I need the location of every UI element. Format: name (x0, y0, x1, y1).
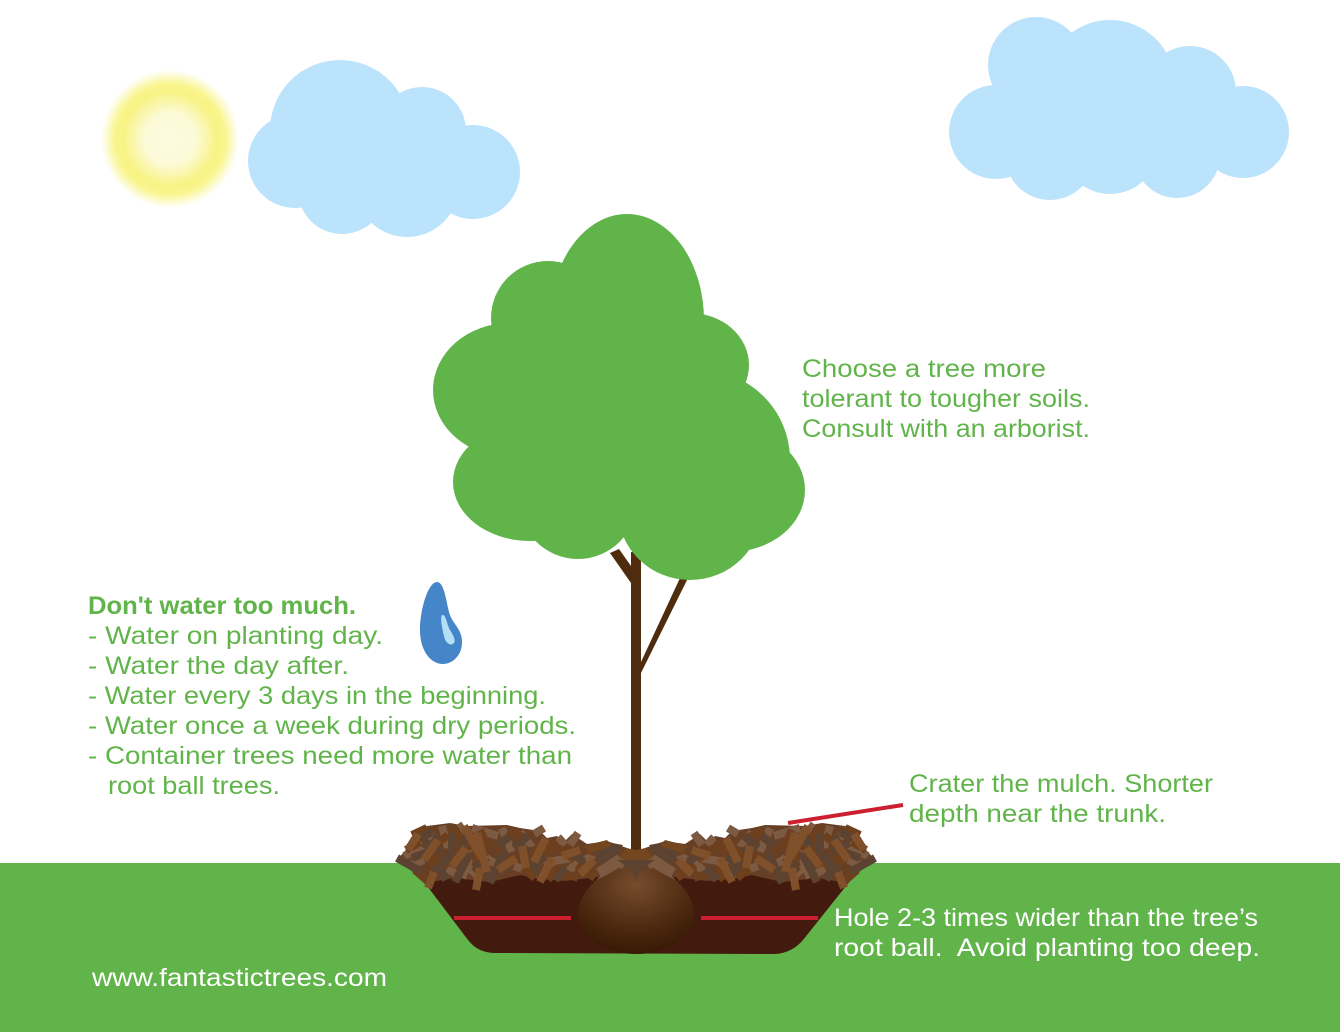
text: choose a tree: Consult with an arborist. (802, 415, 1090, 443)
text: watering advice: - Water the day after. (88, 652, 349, 680)
icon: sun (101, 70, 239, 208)
text: hole size: Hole 2-3 times wider than the tree’s (834, 904, 1258, 932)
text: watering advice: - Water every 3 days in the beginning. (88, 682, 546, 710)
text: watering advice: - Water once a week during dry periods. (88, 712, 576, 740)
ground (0, 863, 1340, 1032)
text: watering advice: - Container trees need more water than (88, 742, 572, 770)
cloud right (949, 17, 1289, 200)
text: watering advice (88, 592, 576, 800)
text: choose a tree (802, 355, 1090, 443)
root ball (578, 862, 694, 954)
centre wedge strands (588, 842, 623, 865)
text: crater the mulch: depth near the trunk. (909, 800, 1166, 828)
planting hole soil (412, 866, 862, 954)
text: crater the mulch: Crater the mulch. Shorter (909, 770, 1213, 798)
red pointer line to mulch (788, 805, 903, 823)
tree trunk and branches (610, 549, 688, 856)
text: watering advice: Don't water too much. (88, 592, 356, 620)
mulch right side (636, 823, 875, 890)
text: choose a tree: tolerant to tougher soils. (802, 385, 1090, 413)
text: crater the mulch (909, 770, 1213, 828)
mulch left side (397, 823, 636, 890)
text: choose a tree: Choose a tree more (802, 355, 1046, 383)
text: watering advice: - Water on planting day. (88, 622, 383, 650)
text: hole size: root ball. Avoid planting too deep. (834, 934, 1260, 962)
icon: water drop (420, 582, 462, 664)
tree crown (433, 214, 805, 580)
text: watering advice: root ball trees. (108, 772, 280, 800)
text: website: www.fantastictrees.com (91, 964, 387, 992)
red line: hole left (454, 916, 571, 920)
text: hole size (834, 904, 1260, 962)
mulch (397, 823, 875, 890)
red line: hole right (701, 916, 818, 920)
mulch shadow spike on root ball (617, 860, 655, 881)
cloud left (248, 60, 520, 237)
tree (433, 214, 805, 856)
